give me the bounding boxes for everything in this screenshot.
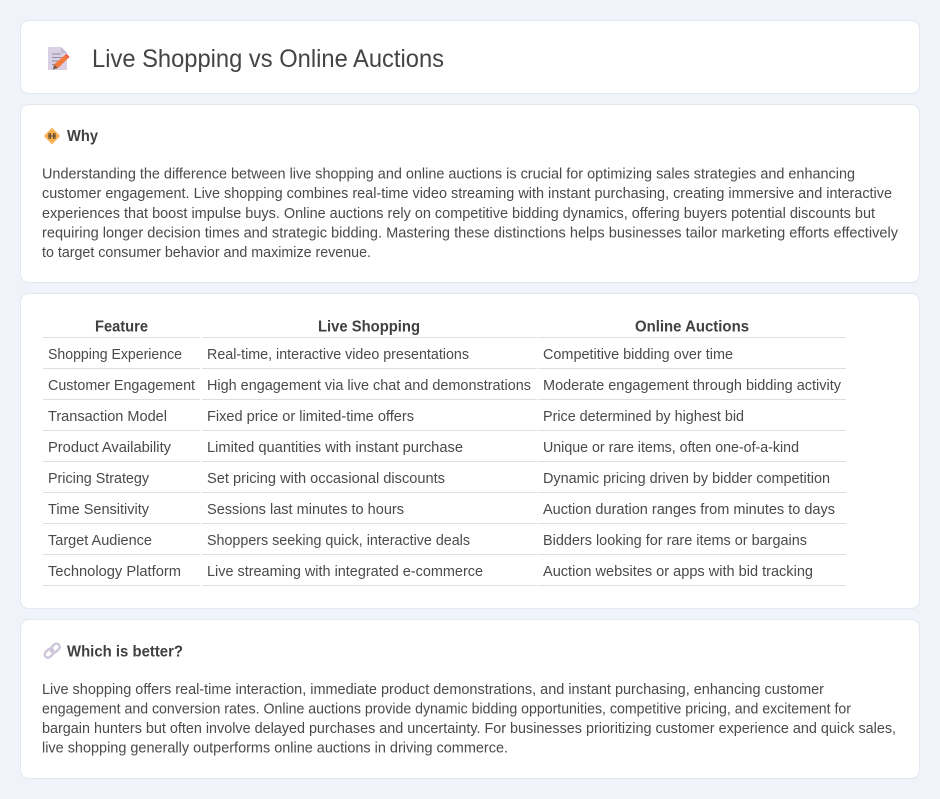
row: transaction model: Transaction Model [48, 409, 167, 425]
row: target audience: Target Audience [48, 533, 152, 549]
row: time sensitivity: Sessions last minutes to hours [207, 502, 404, 518]
text block: why paragraph: customer engagement. Live shopping combines real-time video streaming with instant purchasing, creating immersive and interactive [42, 186, 892, 202]
icon: memo with pencil [48, 47, 70, 70]
row: pricing strategy: Pricing Strategy [48, 471, 150, 487]
row: time sensitivity [48, 502, 835, 518]
row: technology platform [48, 564, 813, 580]
row: customer engagement: High engagement via live chat and demonstrations [207, 378, 531, 394]
table header row: Live Shopping [318, 318, 420, 336]
table header row [95, 318, 749, 336]
panel: which is better [20, 620, 920, 778]
row: target audience: Bidders looking for rare items or bargains [543, 533, 807, 549]
row: time sensitivity: Time Sensitivity [48, 502, 150, 518]
text block: which is better paragraph [42, 682, 896, 756]
icon: chain link [43, 642, 61, 659]
row: technology platform: Live streaming with integrated e-commerce [207, 564, 483, 580]
panel: why [20, 104, 920, 282]
text block: which is better paragraph: live shopping generally outperforms online auctions in driving commerce. [42, 740, 508, 756]
row: time sensitivity: Auction duration ranges from minutes to days [543, 502, 835, 518]
heading: why: Why [67, 128, 98, 145]
row: shopping experience [48, 347, 733, 363]
row: product availability [48, 440, 799, 456]
row: technology platform: Auction websites or apps with bid tracking [543, 564, 813, 580]
text block: which is better paragraph: Live shopping offers real-time interaction, immediate product demonstrations, and instant purchasing, enhancing customer [42, 682, 824, 698]
title: Live Shopping vs Online Auctions [92, 45, 444, 73]
row: pricing strategy: Set pricing with occasional discounts [207, 471, 445, 487]
row: target audience [48, 533, 807, 549]
text block: why paragraph: Understanding the difference between live shopping and online auctions is crucial for optimizing sales strategies and enhancing [42, 166, 855, 182]
row: transaction model: Fixed price or limited-time offers [207, 409, 414, 425]
text block: why paragraph: requiring longer decision times and strategic bidding. Mastering these distinctions helps businesses tailor marketing efforts effectively [42, 226, 899, 242]
heading: which is better: Which is better? [67, 644, 183, 660]
row: customer engagement: Moderate engagement through bidding activity [543, 378, 842, 394]
row: product availability: Unique or rare items, often one-of-a-kind [543, 440, 799, 456]
text block: why paragraph [42, 166, 899, 261]
table header row: Feature [95, 318, 148, 336]
table header row: Online Auctions [635, 318, 749, 336]
panel: comparison table [20, 294, 920, 608]
row: shopping experience: Shopping Experience [48, 347, 182, 363]
row: shopping experience: Competitive bidding over time [543, 347, 733, 363]
row: transaction model [48, 409, 744, 425]
row: target audience: Shoppers seeking quick, interactive deals [207, 533, 470, 549]
text block: why paragraph: to target consumer behavior and maximize revenue. [42, 245, 371, 261]
row: pricing strategy [48, 471, 830, 487]
row: technology platform: Technology Platform [48, 564, 181, 580]
icon: diamond sign [45, 129, 59, 143]
panel: title header [20, 20, 920, 94]
text block: which is better paragraph: engagement and conversion rates. Online auctions provide dynamic bidding opportunities, competitive pricing, and excitement for [42, 702, 851, 718]
row: customer engagement: Customer Engagement [48, 378, 195, 394]
row: product availability: Product Availability [48, 440, 172, 456]
row: customer engagement [48, 378, 842, 394]
text block: which is better paragraph: bargain hunters but often involve delayed purchases and uncertainty. For businesses prioritizing customer experience and quick sales, [42, 721, 896, 737]
row: product availability: Limited quantities with instant purchase [207, 440, 463, 456]
row: transaction model: Price determined by highest bid [543, 409, 744, 425]
text block: why paragraph: experiences that boost impulse buys. Online auctions rely on competitive bidding dynamics, offering buyers potential discounts but [42, 206, 875, 222]
row: shopping experience: Real-time, interactive video presentations [207, 347, 469, 363]
row: pricing strategy: Dynamic pricing driven by bidder competition [543, 471, 830, 487]
